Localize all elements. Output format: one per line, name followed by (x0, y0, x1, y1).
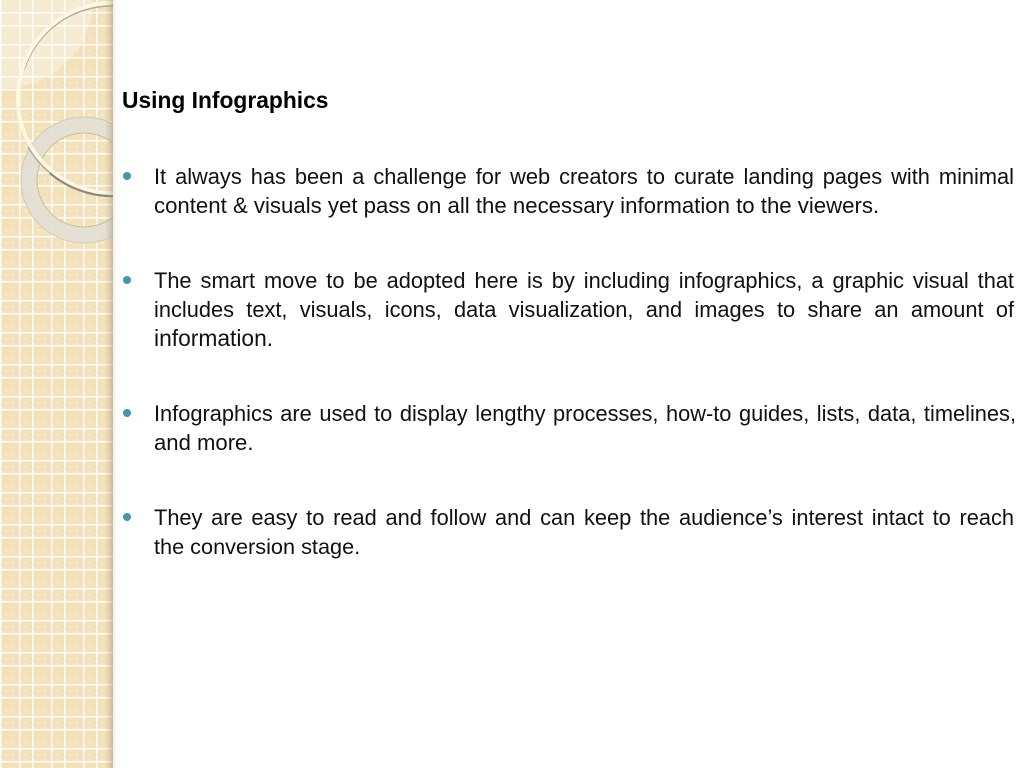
bullet 2 text: information. (154, 325, 273, 351)
bullet 1 (123, 164, 1014, 218)
bullet 3 text: and more. (154, 430, 253, 455)
bullet 4 text: the conversion stage. (154, 534, 360, 559)
bullet 2 (123, 268, 1014, 351)
large ring shadow (28, 147, 50, 173)
heading: Using Infographics (122, 87, 328, 113)
bullet 2 text: The smart move to be adopted here is by including infographics, a graphic visual that (154, 268, 1014, 293)
bullet 1 text: content & visuals yet pass on all the necessary information to the viewers. (154, 193, 879, 218)
bullet 3 text (154, 401, 1016, 455)
bullet 3 (123, 401, 1016, 455)
sidebar edge shadow (106, 0, 113, 768)
pale highlight quarter circle (0, 0, 93, 89)
bullet 4 text (154, 505, 1014, 559)
bullet 2 text (154, 268, 1014, 351)
bullet 4 (123, 505, 1014, 559)
bullet 1 text (154, 164, 1014, 218)
bullet dot 2 (123, 276, 131, 284)
large ring highlight (16, 1, 113, 196)
bullet 3 text: Infographics are used to display lengthy processes, how-to guides, lists, data, timelines, (154, 401, 1016, 426)
bullet 4 text: They are easy to read and follow and can keep the audience’s interest intact to reach (154, 505, 1014, 530)
bullet 2 text: includes text, visuals, icons, data visualization, and images to share an amount of (154, 297, 1014, 322)
decorative sidebar with grid and rings (0, 0, 115, 768)
grey ring (29, 125, 139, 235)
bullet 1 text: It always has been a challenge for web creators to curate landing pages with minimal (154, 164, 1014, 189)
bullet dot 1 (123, 172, 131, 180)
bullet dot 3 (123, 409, 131, 417)
bullet dot 4 (123, 513, 131, 521)
